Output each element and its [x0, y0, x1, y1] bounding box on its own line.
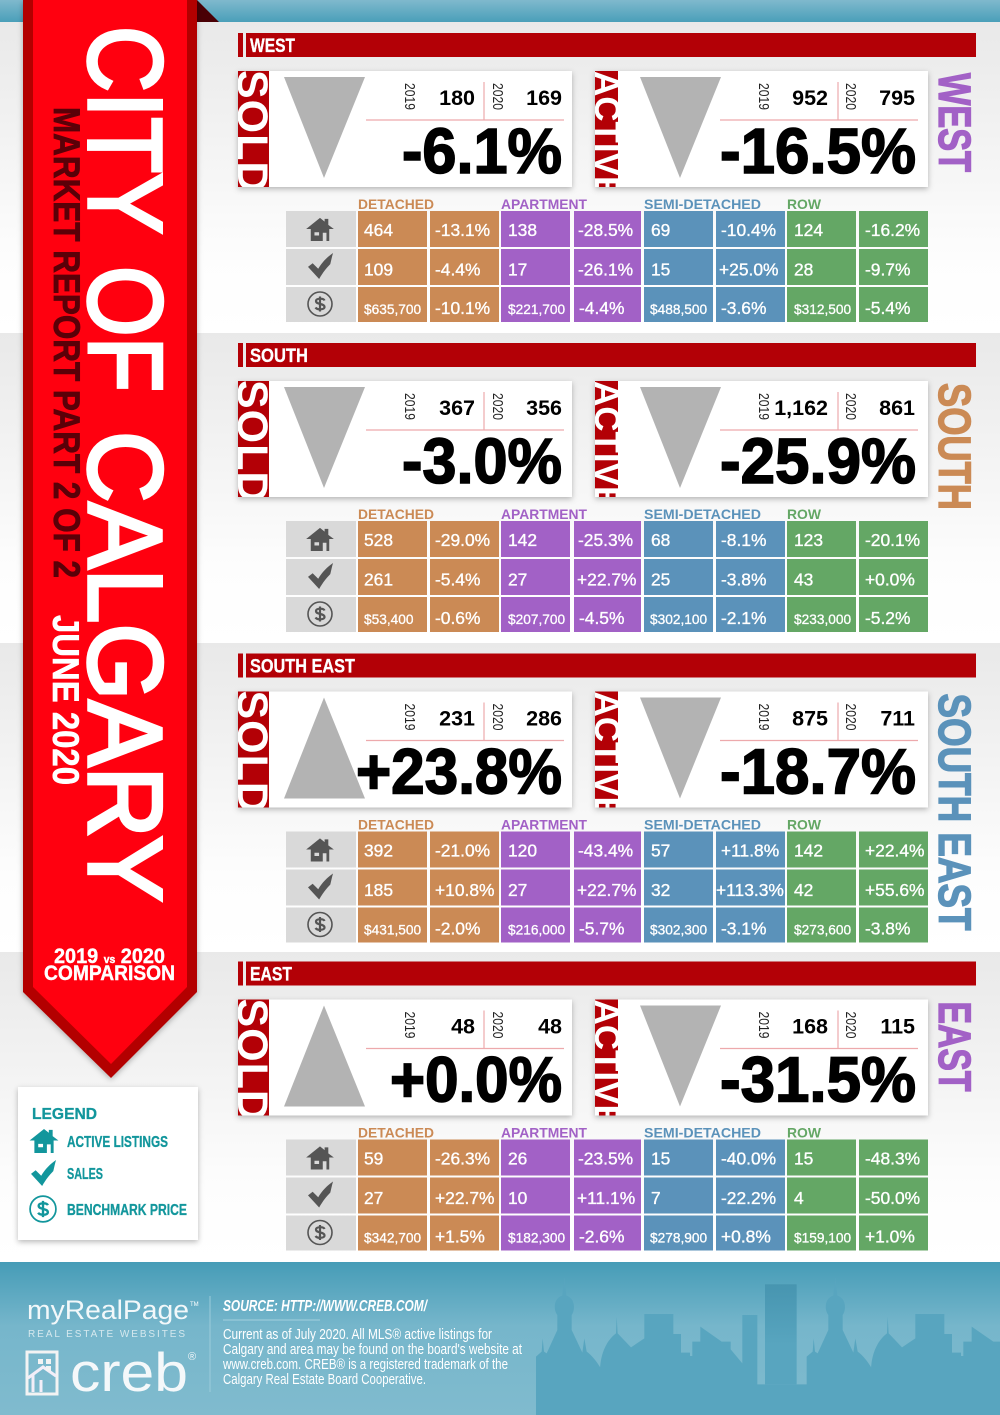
title: CITY: [66, 26, 183, 234]
background panel: east: [0, 952, 1000, 1262]
disclaimer text: www.creb.com. CREB® is a registered trademark of the: [222, 1356, 508, 1373]
row: active listings: -26.3%: [435, 1148, 490, 1168]
row: active listings: 26: [508, 1148, 527, 1168]
row: active listings: 123: [794, 530, 823, 550]
heading bar: South East: SOUTH EAST: [250, 656, 355, 678]
section: SOUTH: [228, 343, 980, 632]
row: sales: 28: [794, 260, 813, 280]
column headers: [358, 1124, 822, 1140]
row: benchmark price: $216,000: [508, 922, 565, 938]
card: active: ACTIVE: [587, 381, 626, 509]
row: active listings: -25.3%: [578, 530, 633, 550]
row: benchmark price: $159,100: [794, 1230, 851, 1246]
comparison label: 2019 vs 2020: [54, 945, 165, 968]
heading bar: South East: [238, 654, 976, 678]
row: active listings: 124: [794, 220, 823, 240]
CREB logo: creb: [70, 1341, 188, 1403]
card: active: 861: [879, 396, 915, 420]
column headers: SEMI-DETACHED: [644, 816, 761, 832]
myRealPage logo: [27, 1295, 199, 1340]
row: benchmark price: [286, 597, 928, 632]
row: benchmark price: $221,700: [508, 302, 565, 317]
card: sold: SOLD: [228, 380, 276, 503]
row: active listings: -40.0%: [721, 1148, 776, 1168]
heading bar: East: EAST: [250, 964, 292, 986]
card: active: 795: [879, 86, 915, 110]
row: sales: 10: [508, 1188, 527, 1208]
section: SOUTH EAST: [228, 654, 980, 942]
row: benchmark price: -3.1%: [721, 918, 766, 938]
card: sold: 231: [439, 706, 475, 730]
row: benchmark price: -2.0%: [435, 918, 480, 938]
row: active listings: -43.4%: [578, 840, 633, 860]
row: benchmark price: $53,400: [364, 612, 414, 627]
row: benchmark price: $302,300: [650, 922, 707, 938]
card: sold: [228, 70, 572, 193]
card: sold: +0.0%: [390, 1044, 562, 1116]
row: sales: +22.7%: [435, 1188, 494, 1208]
card: active: ACTIVE: [587, 692, 626, 820]
row: active listings: 57: [651, 840, 670, 860]
column headers: APARTMENT: [501, 816, 587, 832]
column headers: APARTMENT: [501, 506, 587, 522]
ribbon banner: [23, 0, 197, 1078]
row: active listings: 464: [364, 220, 393, 240]
card: active: -18.7%: [720, 736, 916, 808]
card: sold: 2019: [401, 393, 418, 420]
column headers: ROW: [787, 196, 822, 212]
card: active: -25.9%: [720, 425, 916, 497]
row: active listings: -10.4%: [721, 220, 776, 240]
column headers: DETACHED: [358, 196, 434, 212]
row: active listings: 68: [651, 530, 670, 550]
column headers: [358, 816, 822, 832]
row: sales: -26.1%: [578, 260, 633, 280]
row: benchmark price: -5.7%: [579, 918, 624, 938]
row: sales: +11.1%: [577, 1188, 635, 1208]
background panel: south: [0, 333, 1000, 643]
column headers: DETACHED: [358, 506, 434, 522]
column headers: ROW: [787, 506, 822, 522]
disclaimer text: Calgary and area may be found on the board's website at: [223, 1341, 523, 1358]
column headers: ROW: [787, 1124, 822, 1140]
column headers: APARTMENT: [501, 1124, 587, 1140]
card: active: -16.5%: [720, 115, 916, 187]
row: benchmark price: $635,700: [364, 302, 421, 317]
myRealPage logo: TM: [190, 1302, 199, 1308]
card: sold: [228, 998, 572, 1122]
title: [66, 26, 183, 902]
column headers: DETACHED: [358, 1124, 434, 1140]
card: active: -31.5%: [720, 1044, 916, 1116]
row: active listings: 15: [794, 1148, 813, 1168]
row: benchmark price: -2.1%: [721, 608, 766, 628]
row: benchmark price: +0.8%: [721, 1226, 771, 1246]
heading bar: East: [238, 962, 976, 986]
row: active listings: 528: [364, 530, 393, 550]
row: sales: 27: [364, 1188, 383, 1208]
row: benchmark price: $488,500: [650, 302, 707, 317]
row: sales: [286, 249, 928, 285]
row: benchmark price: -3.6%: [721, 298, 766, 318]
row: benchmark price: [286, 908, 928, 942]
row: active listings: -16.2%: [865, 220, 920, 240]
data table: South East: [286, 816, 928, 942]
comparison label: COMPARISON: [44, 962, 175, 985]
row: sales: 43: [794, 570, 813, 590]
row: sales: -9.7%: [865, 260, 910, 280]
card: sold: -3.0%: [402, 425, 562, 497]
row: benchmark price: $182,300: [508, 1230, 565, 1246]
row: benchmark price: -5.2%: [865, 608, 910, 628]
row: sales: 25: [651, 570, 670, 590]
row: sales: 185: [364, 880, 393, 900]
row: sales: -4.4%: [435, 260, 480, 280]
card: sold: [228, 380, 572, 503]
row: benchmark price: -5.4%: [865, 298, 910, 318]
card: active: ACTIVE: [587, 71, 626, 199]
date: JUNE 2020: [45, 615, 86, 785]
column headers: SEMI-DETACHED: [644, 196, 761, 212]
row: sales: [286, 870, 928, 906]
row: active listings: -13.1%: [435, 220, 490, 240]
row: benchmark price: +1.0%: [865, 1226, 915, 1246]
row: sales: 32: [651, 880, 670, 900]
row: benchmark price: $312,500: [794, 302, 851, 317]
card: sold: 180: [439, 86, 475, 110]
card: sold: 2020: [489, 393, 506, 420]
row: active listings: 69: [651, 220, 670, 240]
data table: West: [286, 196, 928, 322]
background panel: south east: [0, 643, 1000, 952]
row: active listings: [286, 1140, 928, 1176]
subtitle: MARKET REPORT PART 2 OF 2: [46, 107, 87, 578]
row: active listings: -29.0%: [435, 530, 490, 550]
card: sold: 356: [526, 396, 562, 420]
card: active: 2020: [842, 1012, 859, 1038]
row: sales: +25.0%: [719, 260, 778, 280]
legend item: active listings: ACTIVE LISTINGS: [67, 1134, 168, 1151]
row: active listings: [286, 521, 928, 557]
card: active: [587, 1000, 928, 1128]
row: sales: 27: [508, 570, 527, 590]
card: sold: 2020: [489, 704, 506, 730]
row: active listings: -8.1%: [721, 530, 766, 550]
row: benchmark price: +1.5%: [435, 1226, 485, 1246]
legend heading: LEGEND: [32, 1106, 97, 1123]
card: sold: +23.8%: [356, 736, 562, 808]
row: benchmark price: $431,500: [364, 922, 421, 938]
row: active listings: -20.1%: [865, 530, 920, 550]
row: sales: 42: [794, 880, 813, 900]
card: sold: [228, 690, 572, 814]
comparison label: [44, 945, 175, 985]
row: sales: -50.0%: [865, 1188, 920, 1208]
myRealPage logo: myRealPage: [27, 1295, 189, 1325]
card: active: 2020: [842, 393, 859, 420]
row: active listings: -21.0%: [435, 840, 490, 860]
column headers: DETACHED: [358, 816, 434, 832]
heading bar: West: WEST: [250, 36, 295, 57]
section: WEST: [228, 33, 980, 322]
row: benchmark price: $302,100: [650, 612, 707, 627]
row: benchmark price: $273,600: [794, 922, 851, 938]
row: sales: 15: [651, 260, 670, 280]
card: sold: 2020: [489, 1012, 506, 1038]
row: sales: -3.8%: [721, 570, 766, 590]
row: sales: 4: [794, 1188, 804, 1208]
card: sold: SOLD: [228, 70, 276, 193]
CREB logo: ®: [188, 1351, 196, 1363]
side label: West: WEST: [929, 73, 980, 172]
footer divider: [209, 1296, 211, 1392]
legend item: sales: [31, 1160, 103, 1186]
column headers: APARTMENT: [501, 196, 587, 212]
row: sales: +10.8%: [435, 880, 494, 900]
card: active: 952: [792, 86, 828, 110]
card: sold: SOLD: [228, 998, 276, 1122]
card: active: 2019: [755, 83, 772, 110]
myRealPage logo: REAL ESTATE WEBSITES: [28, 1329, 185, 1340]
card: active: 2019: [755, 393, 772, 420]
column headers: [358, 506, 822, 522]
data table: East: [286, 1124, 928, 1250]
card: active: 1,162: [774, 396, 828, 420]
row: active listings: 59: [364, 1148, 383, 1168]
side label: South East: SOUTH EAST: [929, 694, 980, 930]
row: benchmark price: [286, 287, 928, 322]
row: active listings: +22.4%: [865, 840, 924, 860]
row: active listings: 142: [794, 840, 823, 860]
heading bar: West: [238, 33, 976, 57]
card: sold: 2020: [489, 83, 506, 110]
section: EAST: [228, 962, 980, 1250]
row: sales: +55.6%: [865, 880, 924, 900]
disclaimer text: Calgary Real Estate Board Cooperative.: [223, 1371, 426, 1388]
card: active: [587, 71, 928, 199]
source line: SOURCE: HTTP://WWW.CREB.COM/: [223, 1298, 428, 1315]
row: sales: -22.2%: [721, 1188, 776, 1208]
row: active listings: 142: [508, 530, 537, 550]
legend item: active listings: [30, 1129, 168, 1153]
row: active listings: -28.5%: [578, 220, 633, 240]
top teal band: [0, 0, 1000, 22]
card: active: ACTIVE: [587, 1000, 626, 1128]
column headers: SEMI-DETACHED: [644, 506, 761, 522]
row: active listings: [286, 832, 928, 868]
card: active: 168: [792, 1014, 828, 1038]
row: sales: [286, 1178, 928, 1214]
legend item: benchmark price: BENCHMARK PRICE: [67, 1202, 187, 1219]
row: active listings: 138: [508, 220, 537, 240]
legend item: benchmark price: [30, 1196, 187, 1222]
row: sales: +22.7%: [577, 570, 636, 590]
disclaimer text: [222, 1326, 523, 1388]
card: sold: 48: [538, 1014, 562, 1038]
card: active: 2020: [842, 704, 859, 730]
card: sold: 2019: [401, 704, 418, 730]
card: active: 875: [792, 706, 828, 730]
card: sold: -6.1%: [402, 115, 562, 187]
column headers: ROW: [787, 816, 822, 832]
heading bar: South: [238, 343, 976, 367]
row: active listings: -48.3%: [865, 1148, 920, 1168]
legend item: sales: SALES: [67, 1166, 103, 1183]
card: active: [587, 692, 928, 820]
row: active listings: 120: [508, 840, 537, 860]
row: benchmark price: $342,700: [364, 1230, 421, 1246]
background panel: west: [0, 22, 1000, 333]
row: sales: 261: [364, 570, 393, 590]
row: sales: +0.0%: [865, 570, 915, 590]
row: benchmark price: -10.1%: [435, 298, 490, 318]
row: sales: [286, 559, 928, 595]
ribbon fold: [197, 0, 219, 22]
heading bar: South: SOUTH: [250, 346, 308, 367]
row: active listings: +11.8%: [721, 840, 779, 860]
row: active listings: -23.5%: [578, 1148, 633, 1168]
row: sales: +113.3%: [716, 880, 784, 900]
legend panel: [18, 1087, 198, 1240]
row: benchmark price: $278,900: [650, 1230, 707, 1246]
row: benchmark price: -0.6%: [435, 608, 480, 628]
card: active: 2019: [755, 1012, 772, 1038]
CREB logo: [27, 1341, 196, 1403]
row: sales: -5.4%: [435, 570, 480, 590]
row: sales: 109: [364, 260, 393, 280]
card: active: 2020: [842, 83, 859, 110]
data table: South: [286, 506, 928, 632]
row: sales: +22.7%: [577, 880, 636, 900]
title: CALGARY: [66, 431, 183, 902]
row: active listings: [286, 211, 928, 247]
disclaimer text: Current as of July 2020. All MLS® active listings for: [223, 1326, 492, 1343]
skyline illustration: [536, 1277, 1000, 1415]
row: benchmark price: -4.4%: [579, 298, 624, 318]
side label: East: EAST: [929, 1002, 980, 1092]
row: benchmark price: -3.8%: [865, 918, 910, 938]
card: sold: 2019: [401, 83, 418, 110]
row: active listings: 392: [364, 840, 393, 860]
footer: [0, 1262, 1000, 1415]
row: benchmark price: -2.6%: [579, 1226, 624, 1246]
card: active: 2019: [755, 704, 772, 730]
column headers: [358, 196, 822, 212]
card: sold: 367: [439, 396, 475, 420]
card: sold: SOLD: [228, 690, 276, 814]
row: benchmark price: [286, 1216, 928, 1250]
row: sales: 17: [508, 260, 527, 280]
row: benchmark price: $207,700: [508, 612, 565, 627]
side label: South: SOUTH: [929, 383, 980, 510]
card: active: [587, 381, 928, 509]
card: sold: 169: [526, 86, 562, 110]
card: active: 711: [880, 706, 915, 730]
row: benchmark price: $233,000: [794, 612, 851, 627]
card: sold: 286: [526, 706, 562, 730]
title: OF: [66, 266, 183, 392]
row: sales: 27: [508, 880, 527, 900]
row: benchmark price: -4.5%: [579, 608, 624, 628]
card: active: 115: [880, 1014, 915, 1038]
card: sold: 48: [451, 1014, 475, 1038]
column headers: SEMI-DETACHED: [644, 1124, 761, 1140]
row: active listings: 15: [651, 1148, 670, 1168]
row: sales: 7: [651, 1188, 661, 1208]
card: sold: 2019: [401, 1012, 418, 1038]
